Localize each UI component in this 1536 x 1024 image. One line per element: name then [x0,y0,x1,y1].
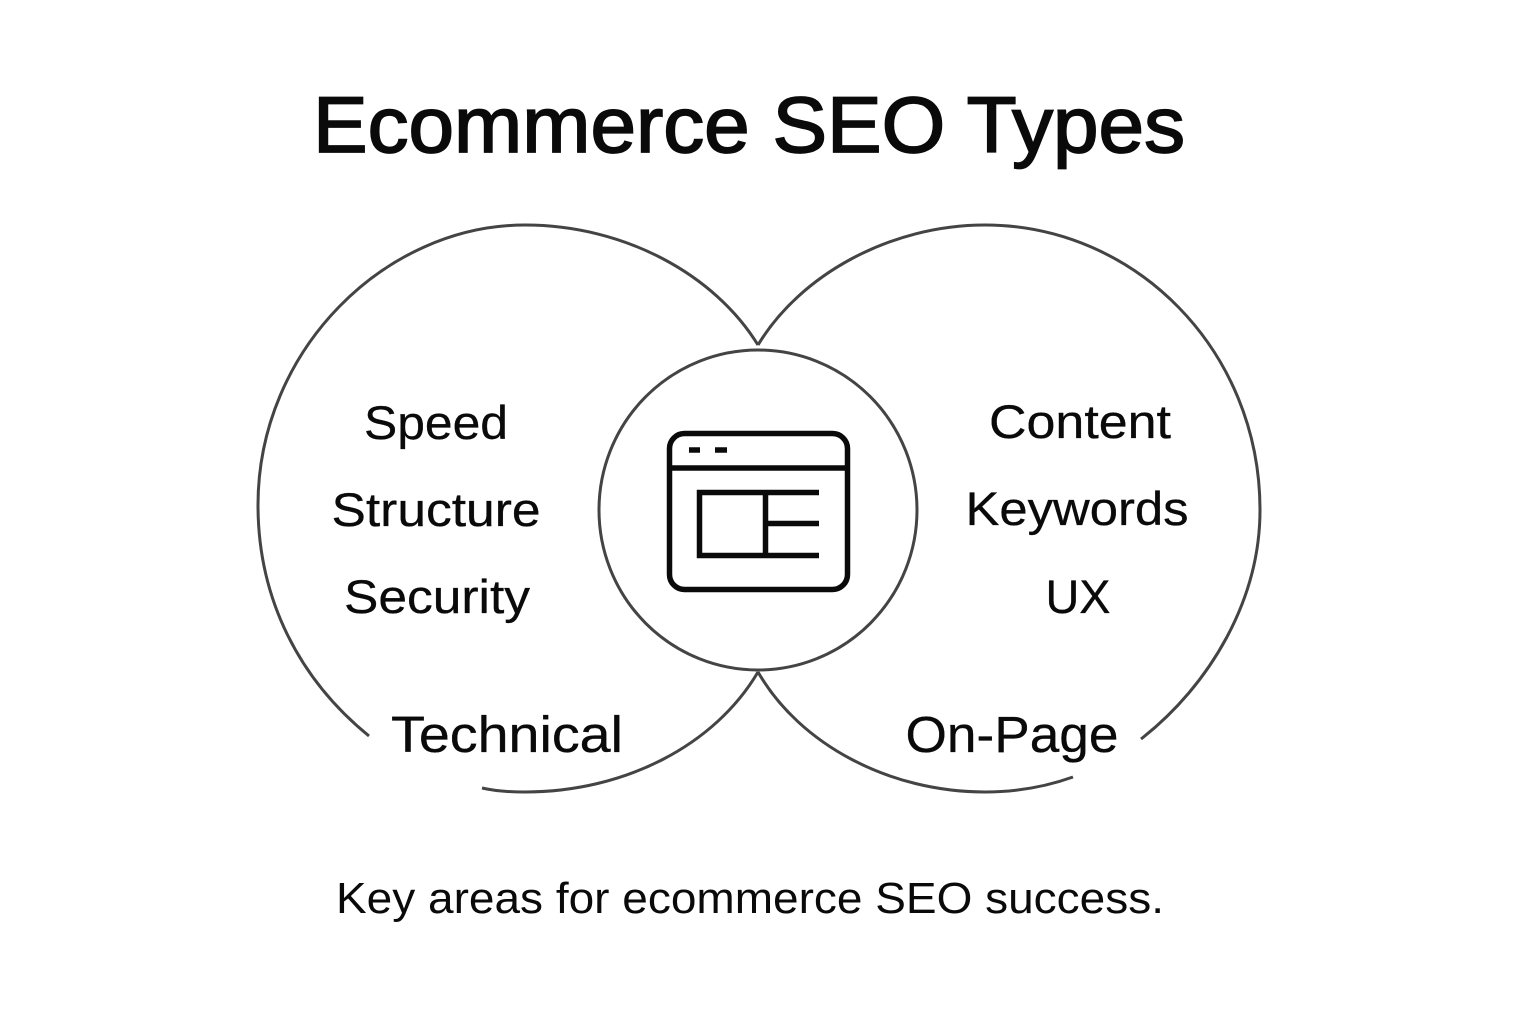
caption: Key areas for ecommerce SEO success. [336,874,1164,923]
right list: on-page items: UX [1046,570,1110,623]
right list: on-page items: Keywords [966,482,1188,535]
title: Ecommerce SEO Types [313,80,1185,169]
venn diagram: left circle (Technical) [258,225,758,792]
left list: technical items: Structure [332,483,540,536]
venn diagram: right circle (On-Page) [758,225,1260,792]
label: On-Page: On-Page [906,706,1118,763]
right list: on-page items: Content [989,395,1171,448]
left list: technical items: Security [344,570,531,623]
icon: browser window [669,434,848,590]
right list: on-page items [966,395,1188,623]
venn diagram: center circle [599,350,917,670]
left list: technical items [332,396,540,623]
label: Technical: Technical [391,706,623,763]
left list: technical items: Speed [364,396,508,449]
